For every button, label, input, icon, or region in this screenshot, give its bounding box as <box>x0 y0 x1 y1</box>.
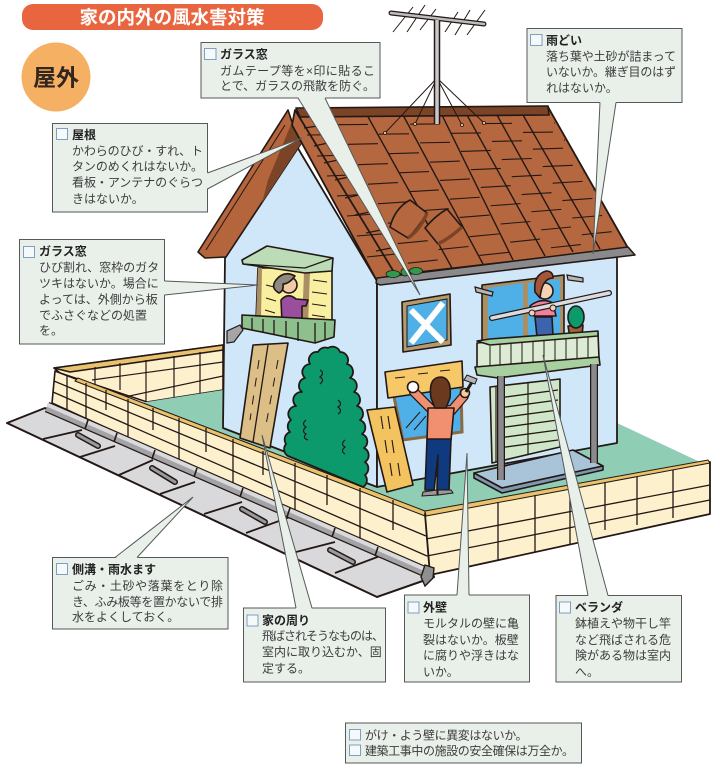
callout: veranda: など飛ばされる危 <box>575 633 671 647</box>
callout: rain gutter: 落ち葉や土砂が詰まって <box>546 48 676 64</box>
shutter <box>490 379 560 463</box>
taped window <box>402 294 451 352</box>
callout: exterior wall: いか。 <box>423 665 459 679</box>
callout: exterior wall <box>404 453 530 682</box>
callout: veranda: へ。 <box>575 665 599 679</box>
shrub <box>284 347 369 487</box>
callout: roof <box>52 124 302 212</box>
callout: side ditch and rainwater basin: 水をよくしておく。 <box>72 610 179 624</box>
callout: glass window (left): を。 <box>39 324 63 338</box>
leaning boards <box>240 343 288 448</box>
balcony posts <box>501 364 594 480</box>
callout: additional checks: がけ・よう壁に異変はないか。 <box>365 728 527 742</box>
man hammering <box>408 375 477 496</box>
callout: glass window (upper): とで、ガラスの飛散を防ぐ。 <box>220 78 375 93</box>
brackets for drying pole <box>475 275 583 296</box>
drying pole <box>492 293 609 318</box>
callout: around the house: 飛ばされそうなものは、 <box>262 629 384 643</box>
callout: roof: かわらのひび・すれ、ト <box>72 144 203 158</box>
callout: roof: きはないか。 <box>72 192 144 206</box>
callout: glass window (left): ガラス窓 <box>39 244 87 258</box>
callout: side ditch and rainwater basin: き、ふみ板等を置かないで排 <box>72 595 223 609</box>
callout: around the house: 室内に取り込むか、固 <box>262 645 382 659</box>
callout: glass window (left): ツキはないか。場合に <box>39 276 159 290</box>
callout: additional checks <box>346 723 582 763</box>
side window with woman <box>242 246 335 343</box>
badge: outdoors: 屋外 <box>33 64 79 90</box>
callout: rain gutter: いないか。継ぎ目のはず <box>546 65 676 79</box>
callout: around the house: 家の周り <box>262 612 310 628</box>
kerb <box>47 404 434 586</box>
woman on balcony <box>530 271 556 337</box>
callout: roof: 看板・アンテナのぐらつ <box>72 176 203 190</box>
callout: veranda: 鉢植えや物干し竿 <box>575 616 671 630</box>
title banner <box>22 4 323 30</box>
callout: exterior wall: モルタルの壁に亀 <box>423 616 519 630</box>
callout: side ditch and rainwater basin: ごみ・土砂や落葉をとり除 <box>72 578 223 593</box>
callout: glass window (left): よっては、外側から板 <box>39 292 158 306</box>
gable wall <box>223 140 377 487</box>
leaning yellow board <box>367 407 413 492</box>
ground <box>140 390 700 513</box>
front boundary wall, left run <box>52 371 434 577</box>
callout: glass window (left): でふさぐなどの処置 <box>39 308 147 322</box>
callout: roof: 屋根 <box>72 127 96 142</box>
callout: veranda <box>543 355 682 682</box>
callout: veranda: ベランダ <box>575 600 623 614</box>
callout: glass window (upper) <box>201 42 420 295</box>
leaves in gutter <box>386 268 422 278</box>
boarded window <box>385 361 463 440</box>
potted plant <box>568 306 584 338</box>
back boundary wall <box>54 345 223 402</box>
callout: veranda: 険がある物は室内 <box>575 648 671 662</box>
gable barge board <box>198 110 302 258</box>
callout: glass window (upper): ガラス窓 <box>220 46 268 62</box>
callout: exterior wall: 裂はないか。板壁 <box>423 633 519 647</box>
long side wall <box>377 257 617 487</box>
lifted roof tiles <box>390 200 462 244</box>
callout: exterior wall: 外壁 <box>423 600 447 614</box>
downpipe <box>227 325 243 343</box>
callout: around the house: 定する。 <box>262 662 310 676</box>
callout: glass window (upper): ガムテープ等を×印に貼るこ <box>220 63 375 78</box>
callout: rain gutter <box>527 28 682 254</box>
balcony window <box>482 275 564 350</box>
main roof <box>292 106 628 281</box>
front boundary wall, right run <box>425 460 710 575</box>
antenna <box>384 5 486 134</box>
balcony base slab <box>474 450 603 493</box>
gutter slabs <box>7 408 434 597</box>
rain gutter <box>376 247 635 285</box>
callout: rain gutter: れはないか。 <box>546 81 618 95</box>
callout: glass window (left): ひび割れ、窓枠のガタ <box>39 260 159 274</box>
callout: side ditch and rainwater basin: 側溝・雨水ます <box>72 562 156 576</box>
title banner: 家の内外の風水害対策 <box>79 7 265 28</box>
woman at side window <box>274 274 308 323</box>
badge: outdoors <box>22 42 90 112</box>
roof ridge <box>296 106 549 117</box>
illustration: house and grounds <box>7 5 710 597</box>
callout: side ditch and rainwater basin <box>52 497 228 629</box>
callout: additional checks: 建築工事中の施設の安全確保は万全か。 <box>365 743 574 758</box>
callout: exterior wall: に腐りや浮きはな <box>423 648 519 662</box>
callout: glass window (left) <box>20 240 258 344</box>
balcony railing <box>475 331 600 378</box>
callout: rain gutter: 雨どい <box>546 32 582 48</box>
callout: around the house <box>244 435 386 682</box>
callout: roof: タンのめくれはないか。 <box>72 160 203 174</box>
